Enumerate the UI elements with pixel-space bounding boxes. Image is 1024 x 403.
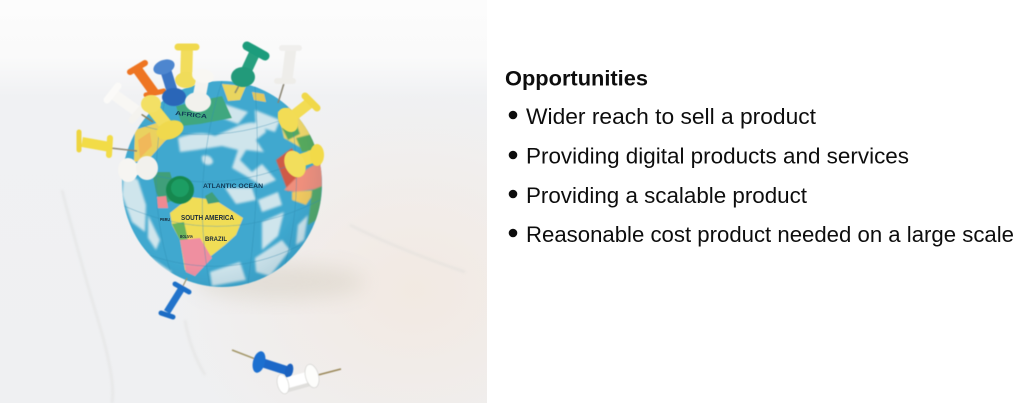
icon: blue pin on table: [232, 350, 295, 379]
icon: yellow right pin: [274, 96, 317, 136]
globe map labels: PERU: [160, 217, 170, 222]
icon: blue pin standing below globe: [161, 278, 189, 317]
globe map labels: BOLIVIA: [180, 234, 194, 239]
icon: yellow left pin: [79, 132, 137, 155]
Africa and coloured countries: [276, 104, 322, 225]
top land: [222, 84, 246, 101]
icon: globe: [122, 81, 322, 287]
globe map labels: [160, 111, 263, 243]
icon: green top pin: [231, 46, 265, 93]
list item: scalable product: Providing a scalable product: [526, 183, 807, 208]
panel: photo of globe with push pins: [0, 40, 487, 403]
globe map labels: AFRICA: [175, 111, 208, 120]
icon: blue top pin: [151, 57, 186, 106]
graticule: [122, 81, 322, 287]
pale land masses: [122, 104, 308, 286]
list item: wider reach: Wider reach to sell a product: [526, 104, 816, 129]
globe shadow: [195, 264, 365, 300]
icon: white top pin: [184, 72, 212, 113]
globe map labels: ATLANTIC OCEAN: [203, 184, 263, 190]
list item: reasonable cost: Reasonable cost product needed on a large scale: [526, 222, 1014, 247]
icon: green centre pin: [166, 176, 194, 204]
heading: Opportunities: Opportunities: [505, 68, 648, 90]
icon: yellow middle pin: [141, 95, 186, 143]
icon: orange pin: [130, 63, 164, 95]
icon: white pin on table: [275, 363, 341, 395]
icon: yellow top pin: [175, 47, 197, 88]
icon: yellow right lower pin: [284, 143, 325, 178]
marble background: [0, 69, 487, 403]
icon: white right pin: [277, 48, 299, 103]
icon: white lower left pin: [118, 156, 158, 182]
Central America: [153, 172, 172, 203]
globe map labels: BRAZIL: [205, 237, 227, 243]
globe map labels: SOUTH AMERICA: [181, 213, 234, 222]
panel: opportunities text: [505, 68, 1014, 247]
South America: [170, 197, 243, 276]
list item: digital products: Providing digital products and services: [526, 144, 909, 168]
icon: white left pin: [107, 86, 153, 122]
